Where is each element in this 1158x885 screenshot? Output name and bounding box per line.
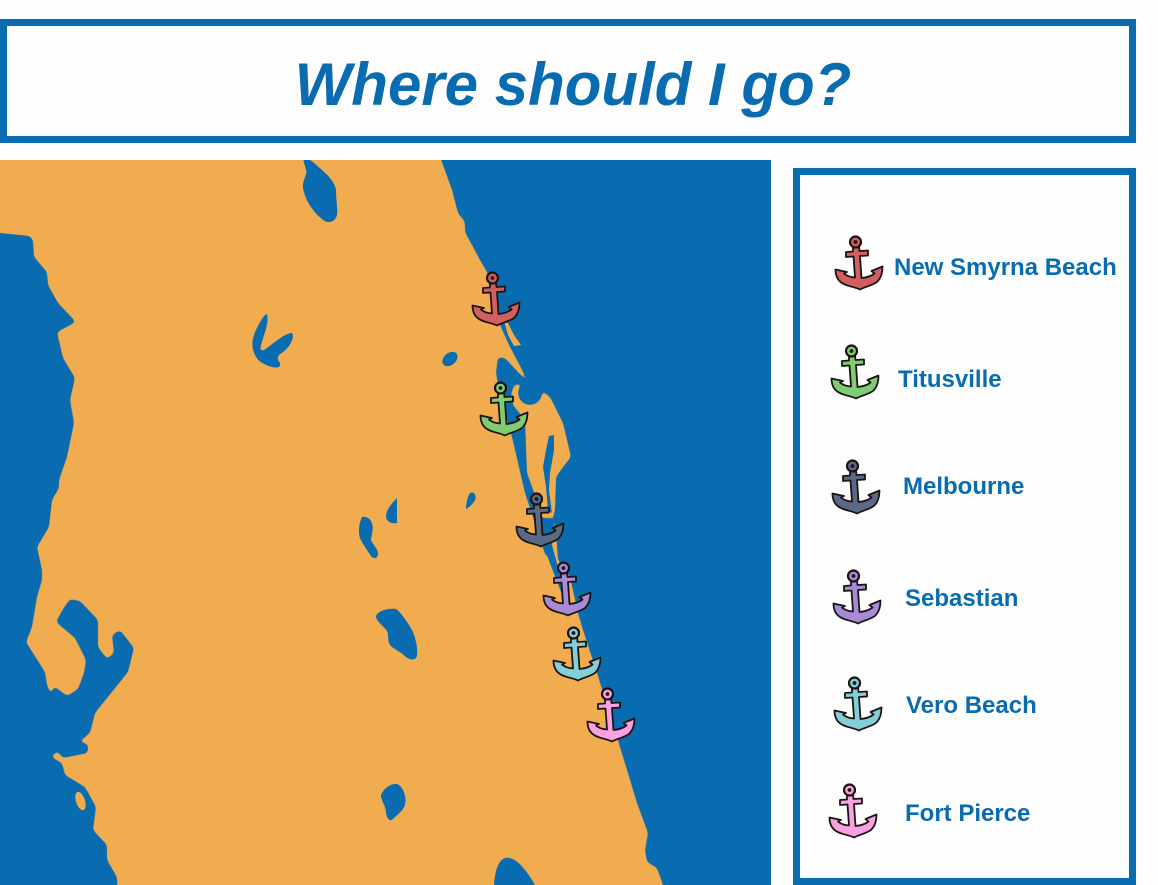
legend item: Melbourne	[832, 460, 1024, 514]
anchor: Melbourne on map	[516, 494, 564, 546]
water: seas	[0, 140, 800, 885]
anchor: Sebastian on map	[544, 562, 590, 616]
Indian River	[496, 357, 553, 560]
Gulf island	[75, 792, 86, 810]
legend item: Melbourne: Melbourne	[903, 473, 1024, 500]
lake south	[381, 784, 406, 820]
title text: Where should I go?	[295, 51, 851, 118]
narrow channel	[546, 545, 562, 593]
legend panel	[796, 172, 1132, 882]
small lake	[442, 352, 458, 366]
legend item: New Smyrna Beach	[836, 236, 1117, 290]
legend item: Titusville: Titusville	[898, 366, 1002, 393]
legend item: Sebastian	[834, 570, 1018, 624]
legend item: New Smyrna Beach: New Smyrna Beach	[894, 254, 1117, 281]
legend item: Fort Pierce: Fort Pierce	[905, 800, 1030, 827]
map of central Florida	[0, 140, 800, 885]
legend item: Vero Beach	[834, 678, 1037, 730]
anchor: Vero Beach on map	[554, 628, 600, 680]
anchor: Fort Pierce on map	[588, 688, 634, 742]
legend item: Fort Pierce	[830, 784, 1030, 838]
Gulf of Mexico	[0, 233, 134, 885]
lake west	[252, 314, 293, 368]
anchor: New Smyrna Beach on map	[472, 272, 520, 326]
lake south central	[376, 609, 417, 660]
legend item: Vero Beach: Vero Beach	[906, 692, 1037, 719]
inlet circle	[518, 381, 542, 405]
small lake	[466, 493, 476, 509]
Atlantic Ocean	[434, 140, 800, 885]
sand spit	[504, 321, 521, 346]
legend item: Titusville	[832, 346, 1002, 398]
anchor: Titusville on map	[480, 382, 528, 436]
lagoon	[543, 435, 554, 513]
lake central	[359, 517, 378, 558]
small lake	[386, 498, 397, 523]
legend item: Sebastian: Sebastian	[905, 585, 1018, 612]
lake bottom edge	[493, 858, 538, 885]
lake north	[302, 155, 337, 222]
title banner	[4, 22, 1132, 140]
